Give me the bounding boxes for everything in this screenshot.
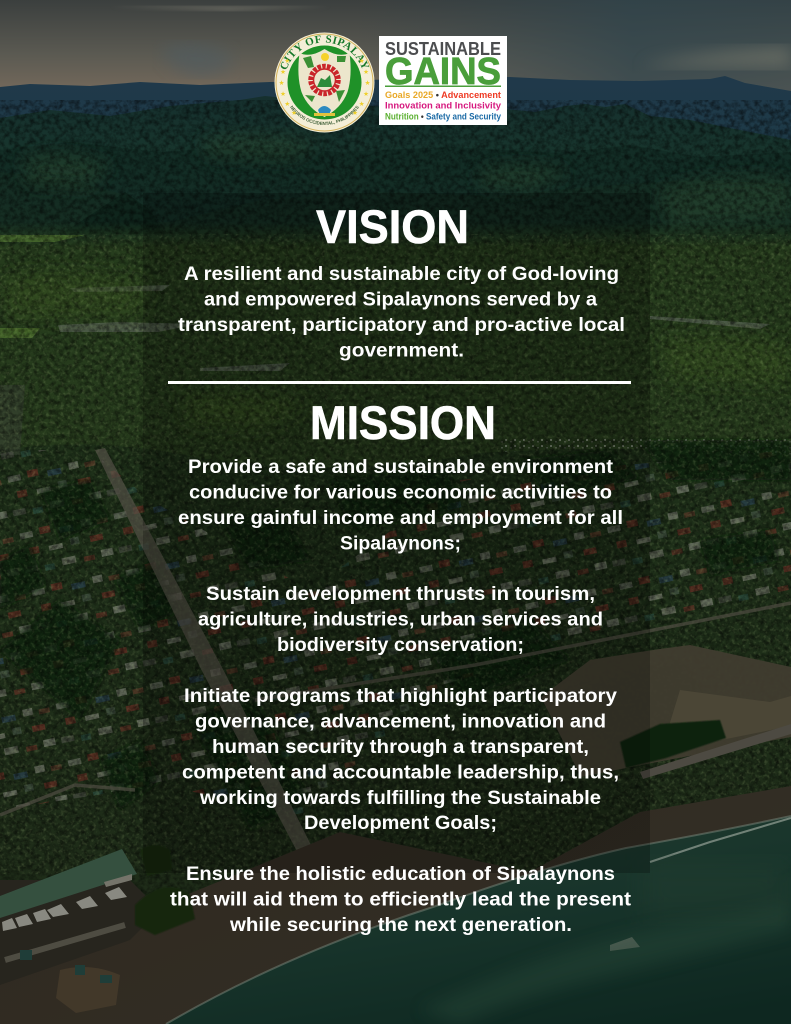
mission item 2: biodiversity conservation; — [277, 634, 524, 656]
mission item 4: while securing the next generation. — [229, 914, 572, 936]
mission item 4 — [170, 863, 632, 936]
logo: City of Sipalay seal: ★ — [359, 100, 365, 108]
mission item 2: agriculture, industries, urban services and — [198, 608, 603, 630]
mission item 4: that will aid them to efficiently lead the present — [170, 888, 632, 910]
logo: City of Sipalay seal: ★ — [363, 90, 369, 98]
mission item 1: ensure gainful income and employment for all — [178, 507, 623, 529]
logo: Sustainable Gains: Innovation and Inclusivity — [385, 100, 502, 112]
vision statement: transparent, participatory and pro-active local — [178, 314, 625, 336]
logo: Sustainable Gains — [379, 36, 507, 125]
mission item 1: Sipalaynons; — [340, 532, 461, 554]
logo: City of Sipalay seal: ★ — [365, 79, 371, 87]
logo: City of Sipalay seal: ★ — [284, 57, 290, 65]
heading: Vision: VISION — [316, 200, 469, 253]
mission item 1: conducive for various economic activities to — [189, 482, 612, 504]
open ground and road — [541, 645, 791, 777]
sea and surf — [166, 816, 791, 1024]
mission item 3: Development Goals; — [304, 812, 497, 834]
mission item 1: Provide a safe and sustainable environment — [188, 456, 614, 478]
logo: City of Sipalay seal: ★ — [291, 109, 297, 117]
logo: Sustainable Gains: SUSTAINABLE — [385, 39, 501, 59]
logo: Sustainable Gains: Goals 2025 • Advancement — [385, 90, 502, 101]
logo: Sustainable Gains: Nutrition • Safety and Security — [385, 112, 502, 122]
mission item 3: human security through a transparent, — [212, 736, 589, 758]
mission item 4: Ensure the holistic education of Sipalaynons — [186, 863, 615, 885]
logo: Sustainable Gains: GAINS — [385, 51, 501, 93]
beach-front hall — [0, 849, 137, 918]
mission item 3: Initiate programs that highlight participatory — [184, 685, 617, 707]
darkening panel — [143, 193, 650, 873]
logo: City of Sipalay seal — [274, 32, 374, 132]
vision statement: A resilient and sustainable city of God-loving — [184, 263, 619, 285]
vision statement: and empowered Sipalaynons served by a — [204, 288, 597, 310]
beach — [0, 786, 791, 1024]
mission item 1 — [178, 456, 623, 554]
mission item 3 — [182, 685, 619, 834]
divider rule — [168, 381, 631, 384]
mission item 2: Sustain development thrusts in tourism, — [206, 583, 595, 605]
mission item 2 — [198, 583, 603, 656]
logo: City of Sipalay seal: ★ — [352, 109, 358, 117]
logo: City of Sipalay seal: CITY OF SIPALAY — [280, 35, 370, 70]
mission statement — [170, 456, 632, 936]
logos — [274, 32, 507, 132]
vision statement: government. — [339, 340, 464, 362]
heading: Mission: MISSION — [310, 396, 496, 449]
logo: City of Sipalay seal: ★ — [284, 100, 290, 108]
mission item 3: competent and accountable leadership, thus, — [182, 762, 619, 784]
vision statement — [178, 263, 625, 362]
logo: City of Sipalay seal: NEGROS OCCIDENTAL, PHILIPPINES — [290, 106, 359, 125]
mission item 3: governance, advancement, innovation and — [195, 710, 606, 732]
mission item 3: working towards fulfilling the Sustainable — [199, 787, 601, 809]
logo: City of Sipalay seal: ★ — [280, 90, 286, 98]
logo: City of Sipalay seal: ★ — [279, 79, 285, 87]
logo: City of Sipalay seal: ★ — [280, 68, 286, 76]
logo: City of Sipalay seal: ★ — [363, 68, 369, 76]
logo: City of Sipalay seal: ★ — [359, 57, 365, 65]
